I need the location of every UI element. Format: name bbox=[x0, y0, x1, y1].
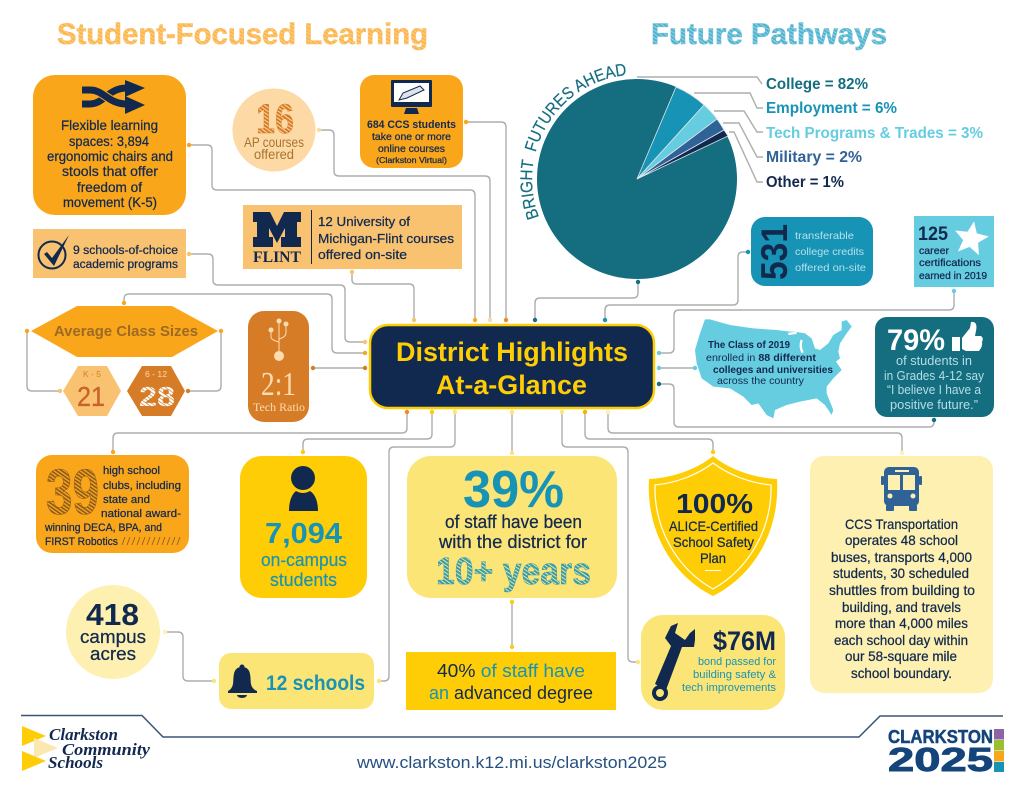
panel: safety shield: School Safety bbox=[673, 534, 754, 550]
panel: bond: building safety & bbox=[693, 669, 777, 681]
hexagon: K-5 class size bbox=[63, 366, 121, 416]
panel: online courses: (Clarkston Virtual) bbox=[376, 155, 447, 165]
panel: 531 college credits: offered on-site bbox=[795, 262, 866, 274]
text: flexible learning: ergonomic chairs and bbox=[47, 148, 173, 164]
pie legend: Other = 1% bbox=[766, 174, 844, 191]
panel: staff tenure: of staff have been bbox=[445, 512, 582, 532]
panel: positive future: 79% bbox=[887, 324, 945, 357]
text: flexible learning: stools that offer bbox=[62, 163, 158, 179]
pie legend: Tech Programs & Trades = 3% bbox=[766, 125, 983, 142]
panel: transportation: CCS Transportation bbox=[845, 516, 958, 532]
panel: schools of choice: academic programs bbox=[73, 259, 178, 271]
panel: positive future: positive future.” bbox=[890, 397, 978, 412]
panel: on-campus students: 7,094 bbox=[265, 518, 342, 550]
icon: shuffle arrows bbox=[82, 80, 145, 114]
pie legend bbox=[766, 76, 983, 191]
panel: central title: District Highlights bbox=[396, 337, 628, 367]
panel: AP courses: offered bbox=[254, 147, 294, 162]
panel: AP courses bbox=[232, 88, 316, 172]
panel: advanced degree: 40% of staff have bbox=[437, 661, 585, 681]
panel: career certifications: 125 bbox=[918, 224, 948, 245]
panel: AP courses: AP courses bbox=[244, 135, 304, 150]
panel: schools of choice: 9 schools-of-choice bbox=[73, 245, 178, 257]
footer rule bbox=[21, 716, 1003, 737]
panel: positive future: of students in bbox=[896, 353, 972, 368]
panel: career certifications: certifications bbox=[919, 257, 981, 269]
panel: USA map bbox=[695, 319, 852, 418]
connector dots bbox=[25, 120, 956, 683]
hexagon: K-5 class size: K - 5 bbox=[83, 369, 101, 379]
panel: advanced degree bbox=[406, 652, 616, 710]
panel: campus acres: campus bbox=[80, 627, 146, 647]
panel: career certifications: earned in 2019 bbox=[919, 270, 987, 282]
panel: high school clubs: 39 bbox=[46, 456, 99, 528]
logo: Clarkston Community Schools: Schools bbox=[48, 753, 103, 772]
panel: tech ratio: 2:1 bbox=[261, 366, 296, 403]
panel: safety shield: ALICE-Certified bbox=[669, 518, 758, 534]
text: flexible learning: movement (K-5) bbox=[63, 194, 157, 210]
panel: on-campus students: students bbox=[270, 570, 337, 590]
panel: bond: $76M bbox=[713, 626, 776, 656]
panel: transportation: operates 48 school bbox=[845, 532, 958, 548]
panel: central title: At-a-Glance bbox=[436, 370, 587, 400]
panel: University of Michigan-Flint: Michigan-Flint courses bbox=[318, 231, 455, 246]
panel: career certifications bbox=[914, 216, 994, 287]
pie chart: future pathways bbox=[537, 79, 737, 279]
icon: wrench bbox=[652, 623, 695, 701]
panel: University of Michigan-Flint: 12 University of bbox=[318, 214, 410, 229]
curved label: bright futures ahead: BRIGHT FUTURES AHEAD bbox=[520, 64, 626, 220]
logo: Clarkston 2025: 2025 bbox=[888, 741, 993, 778]
pie legend: College = 82% bbox=[766, 76, 868, 93]
text: flexible learning: spaces: 3,894 bbox=[69, 133, 149, 149]
panel: high school clubs: high school bbox=[103, 465, 160, 477]
panel: safety shield: 100% bbox=[676, 488, 753, 519]
panel: high school clubs bbox=[36, 455, 189, 553]
icon: block M logo bbox=[253, 212, 301, 247]
panel: bond: tech improvements bbox=[682, 682, 776, 694]
panel: on-campus students: on-campus bbox=[261, 550, 347, 570]
panel: high school clubs: clubs, including bbox=[103, 480, 181, 492]
icon: computer monitor bbox=[391, 80, 432, 114]
panel: 531 college credits: college credits bbox=[795, 246, 864, 258]
panel: transportation: each school day within bbox=[834, 632, 968, 648]
logo: Clarkston Community Schools: Community bbox=[62, 740, 150, 759]
icon: bell bbox=[228, 664, 257, 698]
panel: AP courses: 16 bbox=[256, 95, 294, 142]
footer url: www.clarkston.k12.mi.us/clarkston2025 bbox=[356, 753, 667, 772]
logo: Clarkston Community Schools: Clarkston bbox=[49, 725, 118, 744]
panel: 531 college credits bbox=[751, 217, 873, 286]
panel: on-campus students bbox=[240, 456, 367, 598]
panel: transportation: students, 30 scheduled bbox=[833, 565, 969, 581]
icon: star bbox=[955, 221, 989, 255]
hexagon: 6-12 class size: 6 - 12 bbox=[145, 369, 167, 379]
panel: University of Michigan-Flint: offered on-site bbox=[318, 247, 407, 262]
panel: University of Michigan-Flint: FLINT bbox=[253, 249, 301, 266]
panel: central title bbox=[370, 325, 654, 408]
panel: tech ratio bbox=[248, 311, 309, 422]
panel: schools of choice bbox=[33, 229, 186, 278]
logo: Clarkston 2025 bbox=[888, 726, 1004, 778]
panel: advanced degree: an advanced degree bbox=[429, 683, 593, 703]
text: flexible learning: freedom of bbox=[77, 179, 142, 195]
panel: high school clubs: winning DECA, BPA, and bbox=[44, 522, 162, 534]
panel: online courses: take one or more bbox=[372, 131, 451, 143]
panel: online courses bbox=[360, 75, 463, 168]
panel: USA map: colleges and universities bbox=[713, 364, 833, 376]
panel: tech ratio: Tech Ratio bbox=[253, 402, 305, 414]
panel: safety shield bbox=[649, 456, 777, 596]
panel: transportation: shuttles from building to bbox=[829, 582, 975, 598]
panel: high school clubs: national award- bbox=[101, 508, 181, 520]
panel: high school clubs: FIRST Robotics bbox=[45, 536, 118, 548]
map shape bbox=[695, 319, 852, 418]
panel: positive future bbox=[875, 317, 994, 417]
text: flexible learning bbox=[47, 117, 173, 210]
logo: Clarkston Community Schools bbox=[22, 725, 150, 772]
panel: transportation: school boundary. bbox=[851, 665, 952, 681]
pie legend: Employment = 6% bbox=[766, 100, 897, 117]
panel: transportation: building, and travels bbox=[842, 599, 961, 615]
text: flexible learning: Flexible learning bbox=[61, 117, 158, 133]
panel: safety shield: Plan bbox=[700, 550, 726, 566]
panel: average class sizes: Average Class Sizes bbox=[54, 324, 198, 340]
panel: campus acres bbox=[66, 585, 160, 679]
panel: campus acres: 418 bbox=[86, 597, 139, 632]
panel: positive future: in Grades 4-12 say bbox=[884, 368, 984, 383]
icon: check mark bbox=[38, 235, 69, 268]
panel: transportation: our 58-square mile bbox=[845, 648, 957, 664]
panel: online courses: 684 CCS students bbox=[367, 119, 456, 131]
icon: usb symbol bbox=[268, 318, 288, 361]
panel: 12 schools: 12 schools bbox=[266, 672, 365, 695]
logo: Clarkston 2025: CLARKSTON bbox=[888, 726, 993, 747]
panel: transportation bbox=[810, 456, 993, 693]
panel: staff tenure bbox=[407, 456, 617, 598]
panel: positive future: “I believe I have a bbox=[887, 382, 982, 397]
panel: 12 schools bbox=[219, 653, 374, 709]
panel: campus acres: acres bbox=[90, 644, 136, 664]
icon: bus bbox=[881, 467, 922, 511]
panel: career certifications: career bbox=[919, 245, 950, 257]
panel: high school clubs: state and bbox=[103, 494, 150, 506]
heading: Future Pathways: Future Pathways bbox=[651, 18, 887, 51]
panel: 531 college credits: transferable bbox=[795, 230, 854, 242]
panel: bond bbox=[641, 615, 785, 710]
panel: USA map: across the country bbox=[717, 375, 805, 387]
panel: staff tenure: 10+ years bbox=[436, 551, 591, 593]
panel: online courses: online courses bbox=[378, 143, 445, 155]
panel: staff tenure: with the district for bbox=[438, 532, 587, 552]
panel: staff tenure: 39% bbox=[463, 461, 564, 519]
panel: USA map: The Class of 2019 bbox=[708, 339, 790, 351]
panel: flexible learning spaces bbox=[33, 75, 186, 215]
panel: USA map: enrolled in 88 different bbox=[706, 352, 816, 364]
panel: 531 college credits: 531 bbox=[754, 224, 795, 280]
icon: person bbox=[289, 466, 318, 511]
pie legend: Military = 2% bbox=[766, 149, 862, 166]
hexagon: K-5 class size: 21 bbox=[77, 381, 105, 412]
hexagon: 6-12 class size: 28 bbox=[139, 381, 175, 412]
connector lines bbox=[27, 77, 954, 681]
hexagon: 6-12 class size bbox=[127, 366, 185, 416]
panel: transportation: more than 4,000 miles bbox=[835, 615, 968, 631]
panel: average class sizes bbox=[31, 306, 218, 416]
heading: Student-Focused Learning: Student-Focused Learning bbox=[57, 18, 428, 51]
panel: University of Michigan-Flint bbox=[243, 205, 462, 269]
icon: thumbs up bbox=[952, 322, 983, 351]
panel: bond: bond passed for bbox=[698, 656, 776, 668]
panel: transportation: buses, transports 4,000 bbox=[831, 549, 972, 565]
